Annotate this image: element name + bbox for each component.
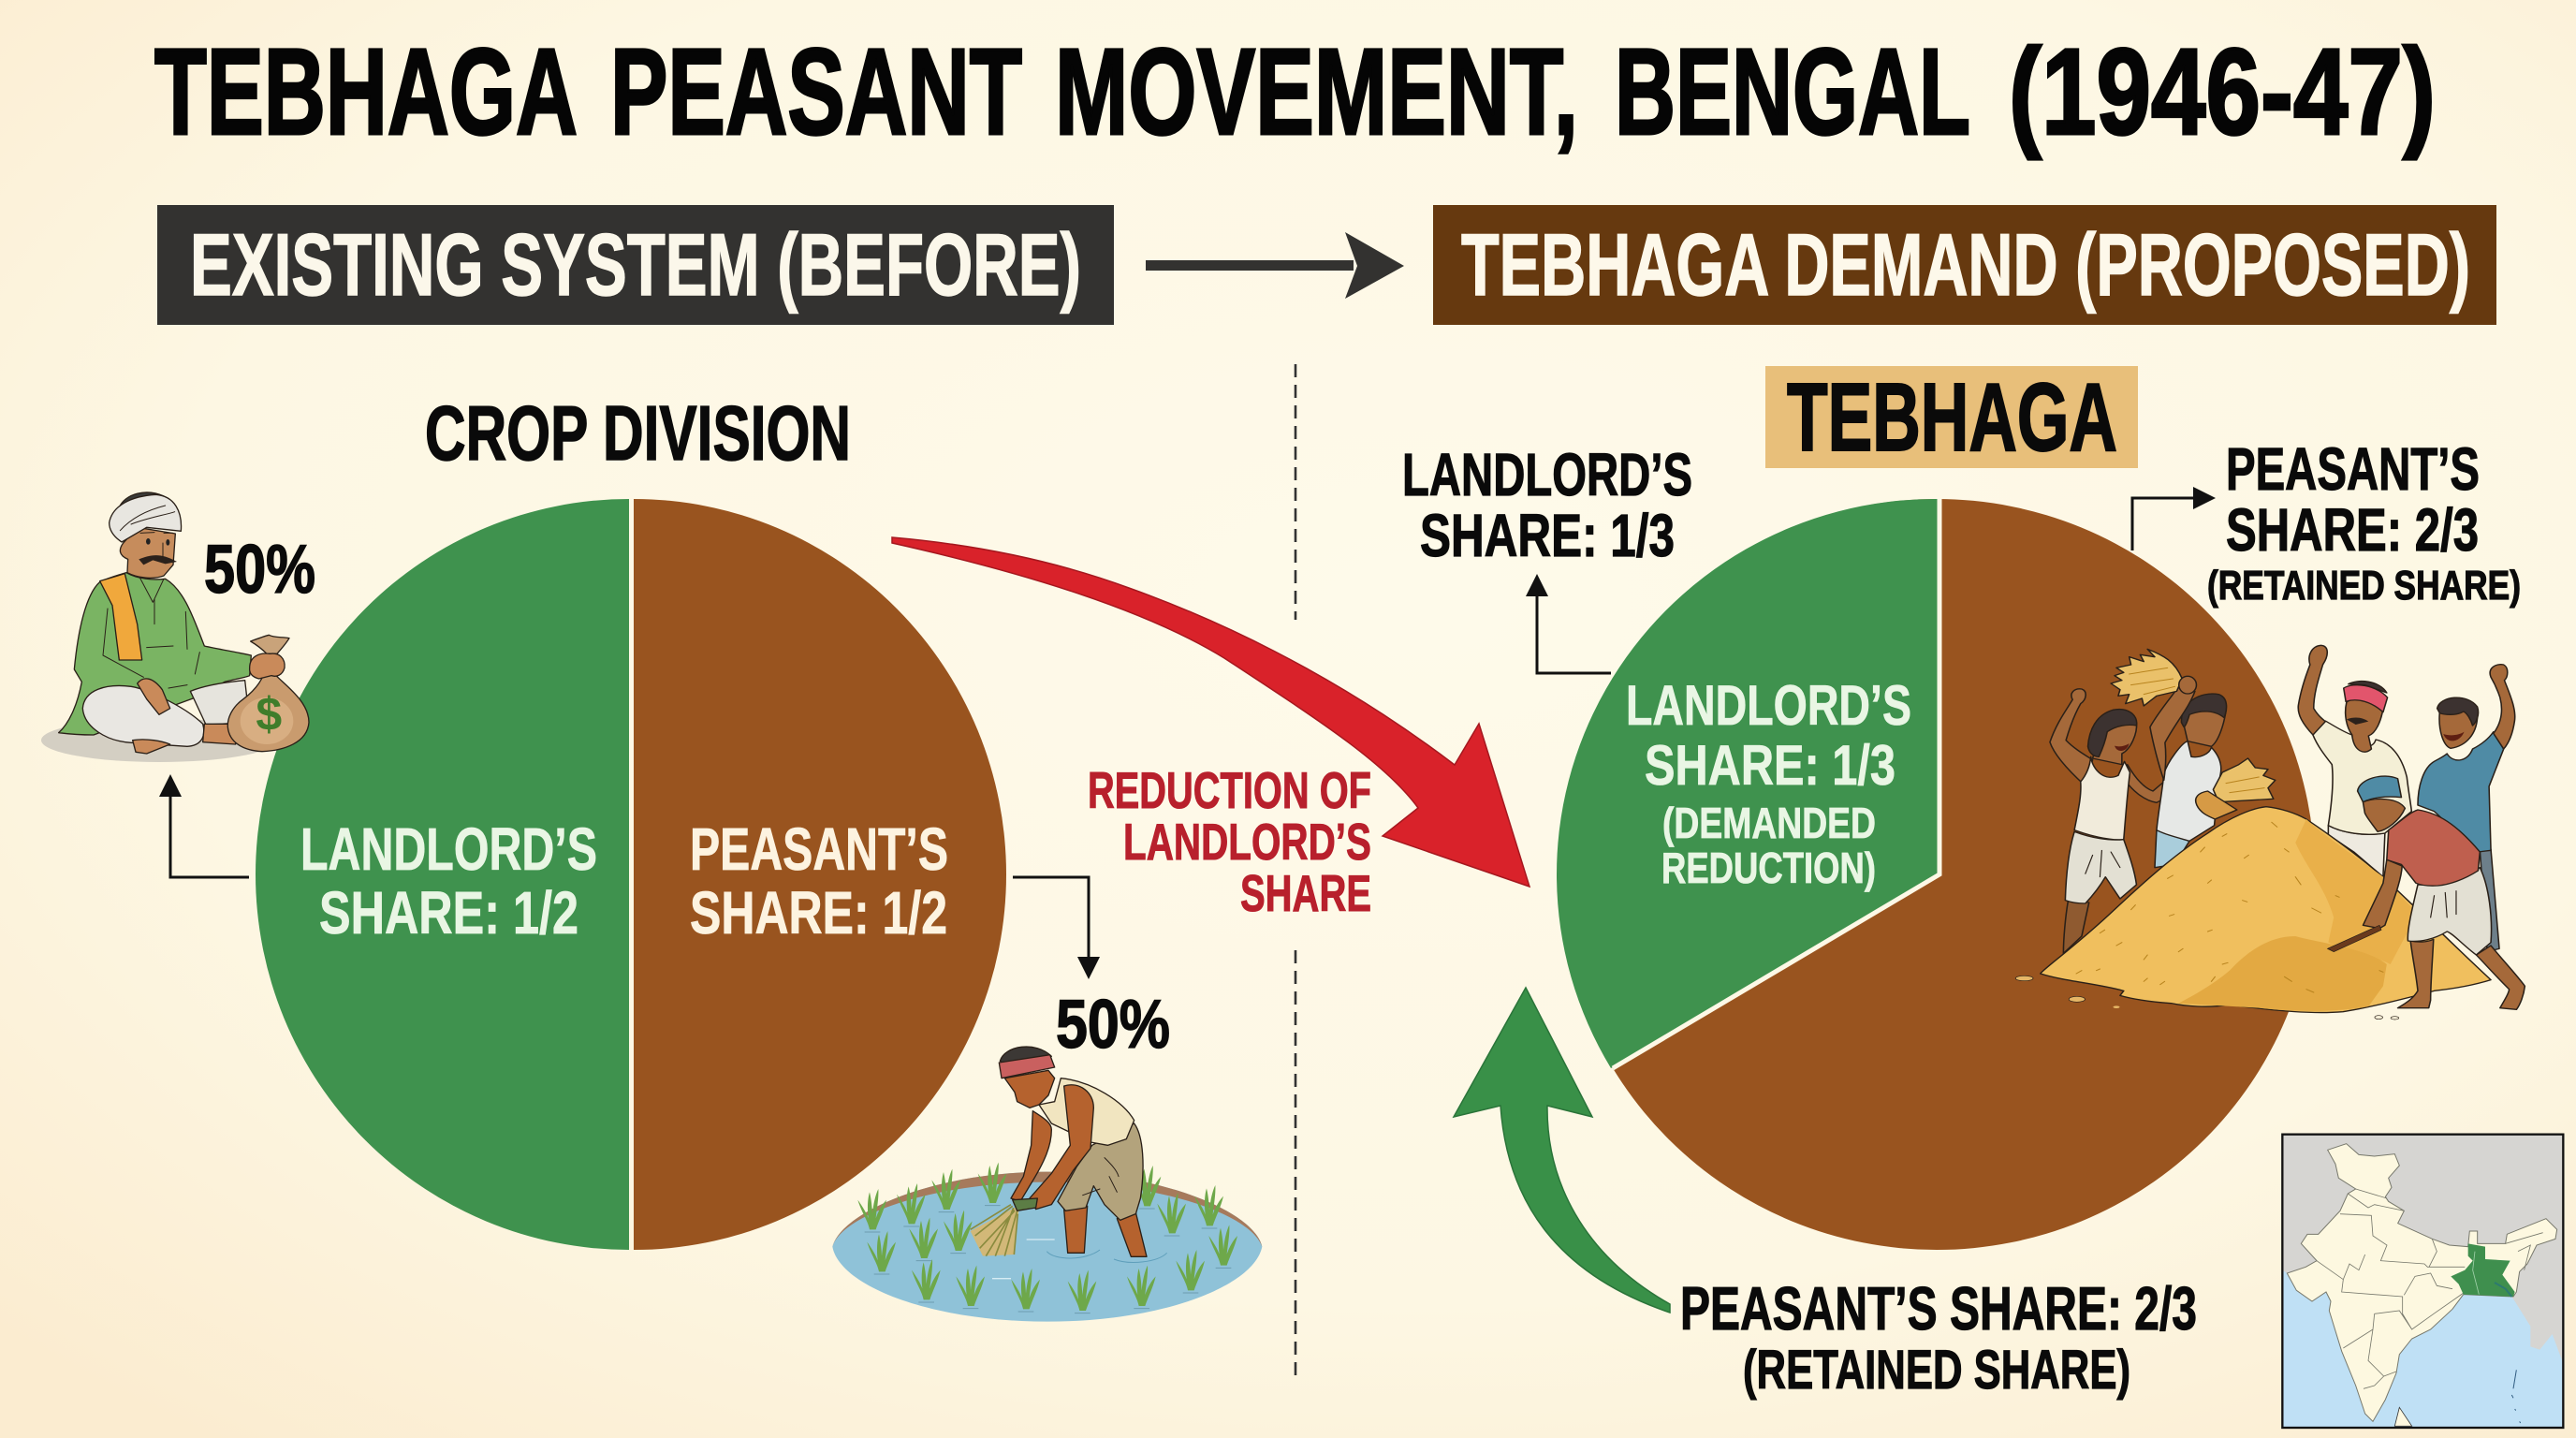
arrow: peasant callout xyxy=(2132,487,2216,550)
label: peasant share: SHARE: 1/2 xyxy=(690,879,947,946)
person: red headband figure xyxy=(2298,645,2411,877)
arrow: peasant share callout xyxy=(1013,877,1100,979)
illustration: landlord with money bag: $ xyxy=(256,688,282,741)
inset map: India with Bengal highlighted xyxy=(2282,1135,2563,1428)
label: landlord share inside: LANDLORD’S xyxy=(1626,674,1911,737)
label: landlord share xyxy=(300,815,597,946)
title: BENGAL xyxy=(1615,22,1970,160)
label: reduction of landlord's share xyxy=(1088,761,1371,922)
header: existing system xyxy=(157,205,1114,325)
arrow: reduction of landlord's share xyxy=(892,537,1530,887)
divider xyxy=(1295,364,1296,1378)
label: 50% peasant: 50% xyxy=(1056,987,1170,1063)
person: digging figure xyxy=(2328,776,2525,1009)
tag: tebhaga: TEBHAGA xyxy=(1787,363,2117,471)
label: landlord share: SHARE: 1/2 xyxy=(319,879,578,946)
label: reduction of landlord's share: SHARE xyxy=(1240,864,1371,922)
label: peasant share: PEASANT’S xyxy=(690,815,948,883)
title: (1946-47) xyxy=(2009,22,2436,160)
person: second figure with sheaf xyxy=(2111,649,2276,868)
person: left figure xyxy=(2050,689,2166,953)
arrow: retained share xyxy=(1454,988,1670,1313)
slice: peasant half xyxy=(634,499,1006,1250)
label: landlord share inside: SHARE: 1/3 xyxy=(1645,734,1895,797)
label: peasant share xyxy=(690,815,948,946)
title: PEASANT xyxy=(610,22,1022,160)
label: landlord share: LANDLORD’S xyxy=(300,815,597,883)
arrow: before to proposed xyxy=(1146,232,1404,299)
label: 50% landlord: 50% xyxy=(204,532,315,608)
title: MOVEMENT, xyxy=(1055,22,1578,160)
arrow: landlord callout xyxy=(1526,574,1611,673)
grain pile xyxy=(2015,807,2491,1020)
slice: landlord one third xyxy=(1557,499,1938,1068)
label: landlord share inside: (DEMANDED xyxy=(1662,799,1876,847)
label: reduction of landlord's share: LANDLORD’S xyxy=(1123,813,1371,871)
slice: landlord half xyxy=(256,499,629,1250)
arrow: landlord share callout xyxy=(159,774,249,877)
title xyxy=(154,22,2436,160)
label: reduction of landlord's share: REDUCTION OF xyxy=(1088,761,1371,819)
illustration: landlord with money bag xyxy=(41,492,309,762)
label: landlord share inside: REDUCTION) xyxy=(1661,844,1876,892)
label: landlord's share outside: LANDLORD’S xyxy=(1402,441,1692,508)
label: peasant's share outside: PEASANT’S xyxy=(2226,435,2480,503)
label: landlord's share outside xyxy=(1402,441,1692,569)
label: peasant's share bottom xyxy=(1680,1274,2197,1401)
pie chart: existing system xyxy=(256,499,1006,1250)
label: landlord share inside xyxy=(1626,674,1911,892)
title: TEBHAGA xyxy=(154,22,578,160)
person: blue shirt figure xyxy=(2418,665,2515,952)
label: peasant's share outside xyxy=(2207,435,2521,609)
slice dividers xyxy=(1613,499,1939,1068)
illustration: celebrating peasants with grain pile xyxy=(2015,645,2525,1020)
label: peasant's share outside: SHARE: 2/3 xyxy=(2226,496,2479,564)
label: peasant's share bottom: PEASANT’S SHARE: 2/3 xyxy=(1680,1274,2197,1343)
label: peasant's share bottom: (RETAINED SHARE) xyxy=(1743,1340,2130,1401)
slice: peasant two thirds xyxy=(1559,499,2315,1250)
pie chart: tebhaga demand xyxy=(1557,499,2315,1250)
illustration: peasant planting rice xyxy=(832,1047,1262,1322)
header: existing system: EXISTING SYSTEM (BEFORE) xyxy=(190,215,1081,314)
label: landlord's share outside: SHARE: 1/3 xyxy=(1420,502,1675,569)
heading: crop division: CROP DIVISION xyxy=(425,389,851,477)
